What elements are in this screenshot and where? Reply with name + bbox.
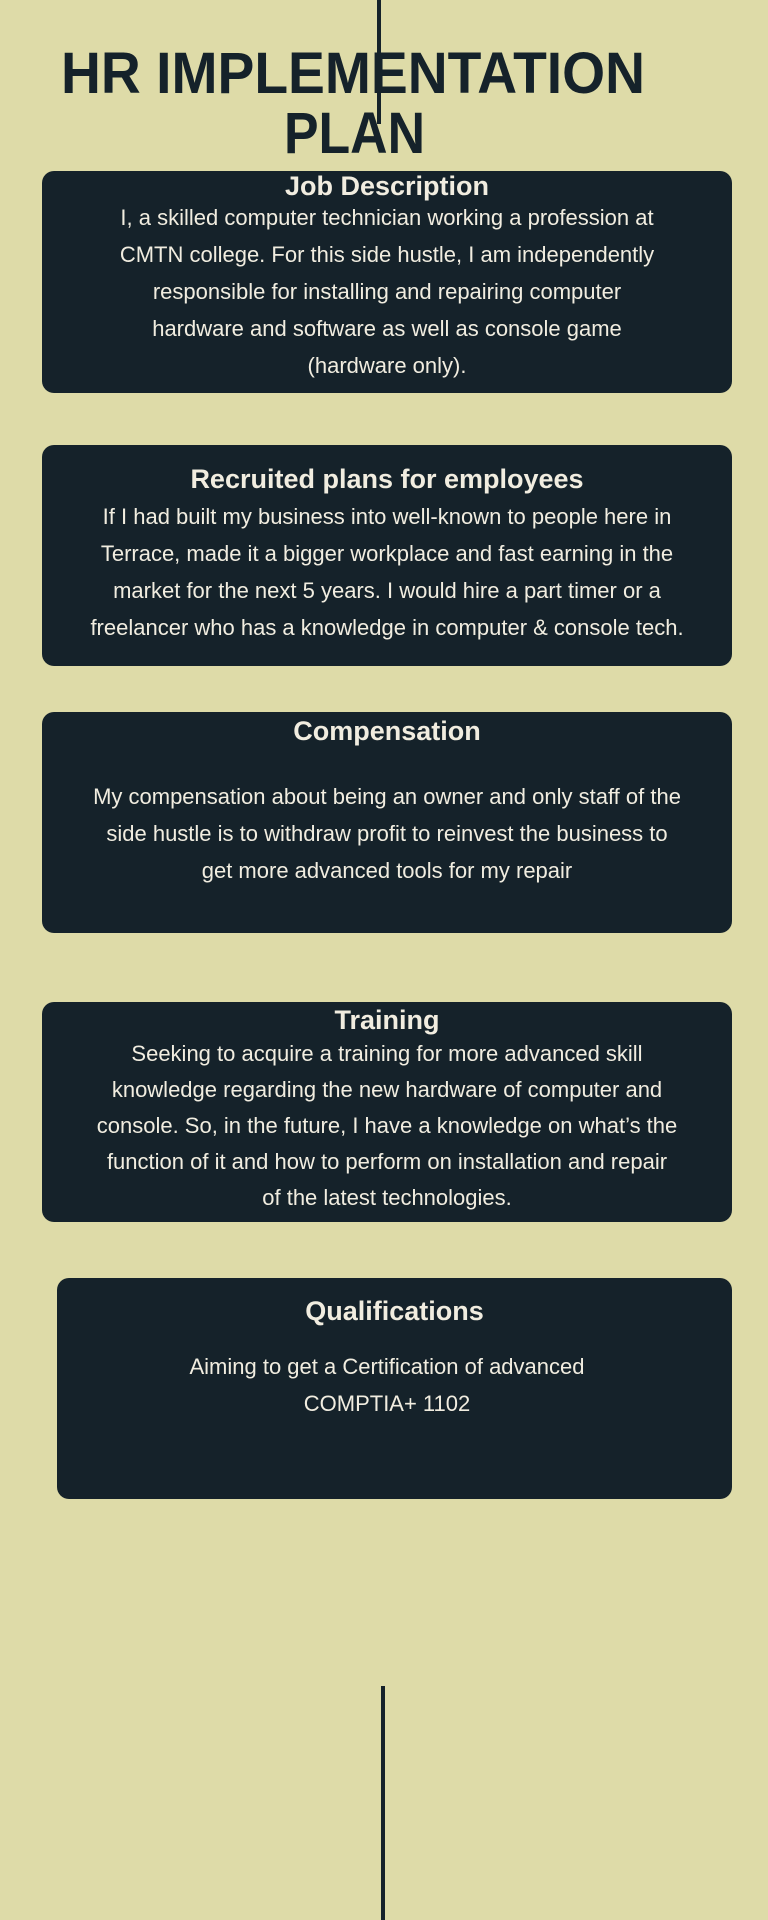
text block: CMTN college. For this side hustle, I am independently [120, 242, 654, 267]
text block: If I had built my business into well-known to people here in [103, 504, 671, 529]
text block [90, 504, 684, 640]
title: PLAN [284, 101, 425, 166]
text block [189, 1354, 584, 1416]
text block: (hardware only). [308, 353, 466, 378]
text block: My compensation about being an owner and only staff of the [93, 784, 681, 809]
title [61, 41, 645, 166]
text block: I, a skilled computer technician working a profession at [120, 205, 654, 230]
panel: qualifications [57, 1278, 732, 1499]
text block: console. So, in the future, I have a knowledge on what’s the [97, 1113, 677, 1138]
text block: responsible for installing and repairing computer [153, 279, 621, 304]
text block: of the latest technologies. [262, 1185, 512, 1210]
decorative line: top [377, 0, 381, 124]
text block [93, 784, 681, 883]
heading: Training [334, 1005, 440, 1035]
text block: function of it and how to perform on installation and repair [107, 1149, 667, 1174]
text block: knowledge regarding the new hardware of computer and [112, 1077, 662, 1102]
text block: COMPTIA+ 1102 [304, 1391, 470, 1416]
panel: recruited plans [42, 445, 732, 666]
text block: freelancer who has a knowledge in computer & console tech. [90, 615, 684, 640]
heading: Recruited plans for employees [190, 464, 584, 494]
heading: Compensation [293, 716, 481, 746]
text block: Aiming to get a Certification of advanced [189, 1354, 584, 1379]
text block: market for the next 5 years. I would hire a part timer or a [113, 578, 661, 603]
text block: Seeking to acquire a training for more advanced skill [131, 1041, 643, 1066]
panel: job description [42, 171, 732, 393]
panel: compensation [42, 712, 732, 933]
title: HR IMPLEMENTATION [61, 41, 645, 106]
text block [120, 205, 654, 378]
heading: Qualifications [305, 1296, 484, 1326]
text block: hardware and software as well as console game [152, 316, 622, 341]
panel: training [42, 1002, 732, 1222]
text block: get more advanced tools for my repair [202, 858, 572, 883]
text block [97, 1041, 677, 1210]
text block: side hustle is to withdraw profit to reinvest the business to [106, 821, 668, 846]
text block: Terrace, made it a bigger workplace and fast earning in the [101, 541, 673, 566]
heading: Job Description [285, 171, 489, 201]
decorative line: bottom [381, 1686, 385, 1920]
